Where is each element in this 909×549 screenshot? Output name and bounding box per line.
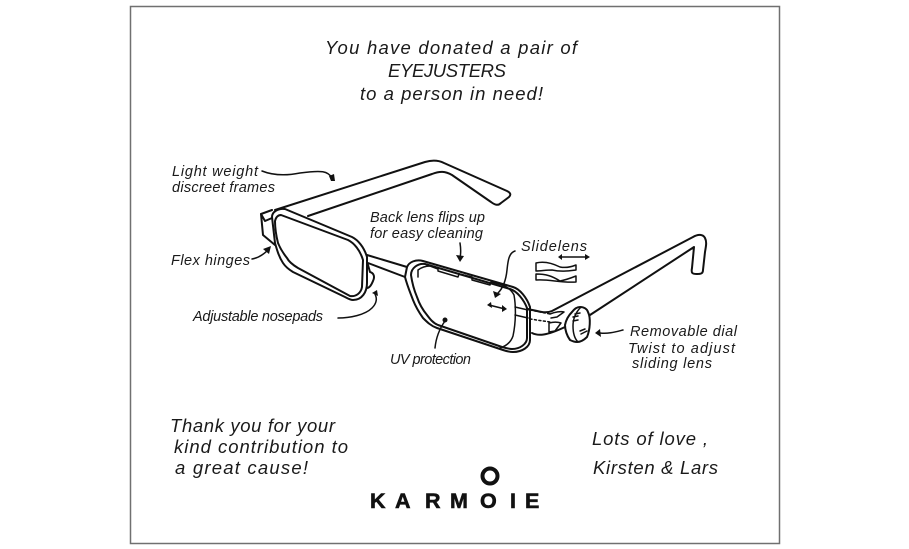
signature: Lots of love ,	[592, 428, 708, 449]
heading: donation message: EYEJUSTERS	[388, 60, 507, 81]
far temple arm	[261, 161, 510, 216]
sliding rail and temple front	[515, 307, 528, 318]
dial	[565, 307, 590, 342]
card border	[130, 6, 780, 544]
label: removable dial	[595, 324, 738, 372]
bridge and nosepad	[367, 255, 407, 288]
heading: donation message: You have donated a pair of	[325, 37, 579, 58]
label: removable dial: Removable dial	[630, 324, 738, 340]
label: adjustable nosepads	[192, 290, 378, 325]
label: light weight discreet frames: discreet frames	[172, 180, 275, 196]
label: slide lens	[493, 239, 590, 298]
logo: Karmoie: KARMOIE	[370, 489, 539, 513]
back lens flip tabs	[418, 266, 503, 285]
signature: Kirsten & Lars	[593, 457, 718, 478]
hinge block	[261, 214, 275, 245]
label: back lens flips up: for easy cleaning	[370, 226, 483, 242]
label: UV protection: UV protection	[390, 352, 471, 368]
label: slide lens: Slidelens	[521, 239, 587, 255]
slide lens curve	[500, 285, 515, 348]
label: light weight discreet frames	[172, 164, 335, 196]
heading: donation message	[325, 37, 579, 104]
label: flex hinges	[171, 246, 271, 269]
label: back lens flips up	[370, 210, 485, 262]
thank-you note: kind contribution to	[174, 436, 348, 457]
right lens rim	[405, 260, 530, 352]
signature	[592, 428, 718, 478]
label: back lens flips up: Back lens flips up	[370, 210, 485, 226]
label: adjustable nosepads: Adjustable nosepads	[192, 309, 323, 325]
left lens rim	[272, 209, 367, 300]
thank-you note: a great cause!	[175, 457, 308, 478]
illustration: glasses	[261, 161, 706, 352]
label: removable dial: Twist to adjust	[628, 341, 736, 357]
label: flex hinges: Flex hinges	[171, 253, 250, 269]
label: UV protection	[390, 318, 471, 368]
thank-you note: Thank you for your	[170, 415, 336, 436]
thank-you note	[170, 415, 348, 478]
logo: Karmoie	[370, 468, 539, 513]
heading: donation message: to a person in need!	[360, 83, 543, 104]
label: removable dial: sliding lens	[632, 356, 712, 372]
label: light weight discreet frames: Light weight	[172, 164, 259, 180]
arrow: slide direction	[487, 302, 507, 312]
